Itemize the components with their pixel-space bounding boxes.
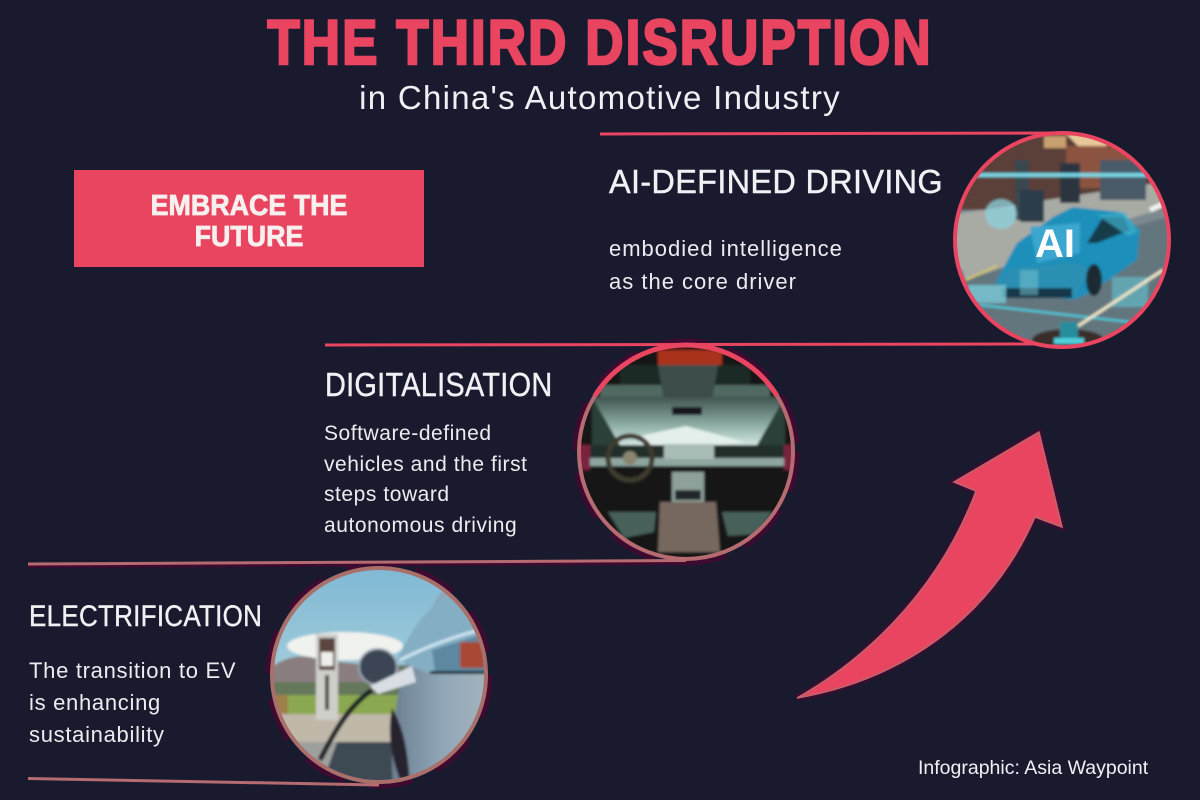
image: AI car: [950, 130, 1175, 351]
text: AI-defined driving description: as the core driver: [609, 269, 797, 294]
line: third step shadow: [28, 563, 686, 566]
heading: AI-defined driving: AI-DEFINED DRIVING: [609, 163, 943, 200]
title: THE THIRD DISRUPTION: [267, 8, 933, 78]
heading: electrification: ELECTRIFICATION: [29, 600, 262, 633]
line: bottom step: [28, 778, 379, 785]
image: car interior: [575, 340, 799, 564]
text: AI-defined driving description: [609, 236, 843, 294]
line: top step: [600, 133, 1062, 134]
line: second step: [325, 344, 1062, 345]
text: AI-defined driving description: embodied intelligence: [609, 236, 843, 261]
callout text: EMBRACE THE: [151, 190, 347, 222]
text: electrification description: is enhancing: [29, 690, 161, 715]
text: digitalisation description: steps toward: [324, 483, 450, 506]
callout: embrace the future: [74, 170, 424, 267]
text: digitalisation description: Software-defined: [324, 422, 492, 445]
text: digitalisation description: vehicles and the first: [324, 452, 528, 476]
credit: Infographic: Asia Waypoint: [918, 757, 1148, 779]
text: electrification description: sustainability: [29, 722, 165, 747]
callout text: [151, 190, 347, 253]
text: digitalisation description: autonomous driving: [324, 514, 517, 536]
heading: digitalisation: DIGITALISATION: [325, 366, 552, 403]
line: third step highlight: [28, 560, 686, 564]
text: digitalisation description: [324, 422, 528, 536]
callout text: FUTURE: [195, 221, 303, 253]
subtitle: in China's Automotive Industry: [359, 79, 841, 116]
text: AI on car: AI: [1035, 222, 1075, 266]
text: electrification description: [29, 658, 236, 747]
image: EV charging: [270, 565, 490, 790]
arrow: [797, 432, 1062, 698]
text: electrification description: The transition to EV: [29, 658, 236, 683]
